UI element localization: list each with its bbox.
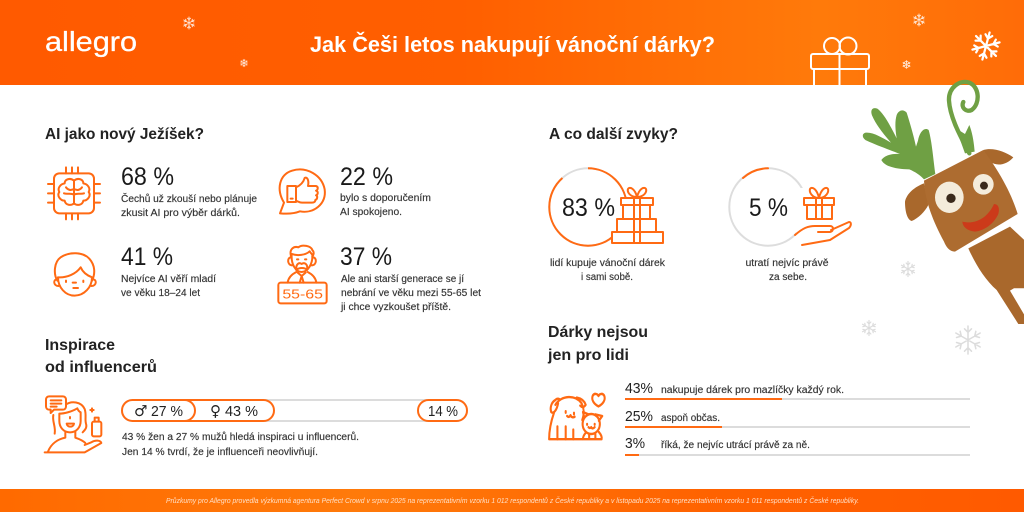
value: 83 % — [562, 194, 615, 222]
chart: 5 % ring — [729, 168, 854, 248]
caption: 83 %: lidí kupuje vánoční dárek — [550, 258, 666, 269]
chart: influencer pills — [122, 400, 467, 421]
heading: customs: A co další zvyky? — [549, 126, 678, 143]
pill: 14 %: 14 % — [428, 403, 458, 420]
pill: men 27 %: ♂ — [134, 402, 147, 420]
description: bylo s doporučením — [340, 193, 431, 204]
ears — [905, 149, 1013, 221]
pill: 14 % — [418, 400, 467, 421]
icon: header snowflakes — [184, 14, 1001, 68]
allegro logo: allegro — [45, 26, 137, 57]
left eye — [935, 182, 964, 213]
heading: AI: AI jako nový Ježíšek? — [45, 126, 204, 143]
stat: 68 % — [48, 163, 257, 219]
stat: 22 % — [280, 163, 431, 218]
description: Ale ani starší generace se jí — [341, 274, 464, 285]
footnote: Průzkumy pro Allegro provedla výzkumná agentura Perfect Crowd v srpnu 2025 na reprezentativním vzorku 1 012 respondentů z České republiky a v listopadu 2025 na reprezentativním vzorku 1 011 respondentů z České republiky. — [166, 496, 859, 505]
right eye — [973, 174, 994, 195]
icon: young face — [54, 253, 96, 296]
icon: older man with age tag: 55-65 — [282, 286, 323, 301]
icon: older man with age tag — [278, 246, 327, 303]
value: 68 % — [121, 163, 174, 191]
icon: header gift — [811, 38, 869, 85]
ring track — [549, 168, 627, 246]
value: 37 % — [340, 243, 392, 271]
bar: 43 % — [625, 380, 970, 400]
pill: men 27 % — [122, 400, 195, 421]
description: Čechů už zkouší nebo plánuje — [121, 192, 257, 205]
icon: influencer with product — [45, 396, 101, 452]
ring track — [729, 168, 807, 246]
influencer description: 43 % žen a 27 % mužů hledá inspiraci u influencerů. — [122, 431, 359, 443]
bar: 3 %: 3% — [625, 435, 645, 452]
value: 5 % — [749, 194, 788, 222]
pill: women 43 %: ♀ — [210, 402, 221, 420]
icon: gift stack — [612, 188, 663, 243]
bar: 43 %: nakupuje dárek pro mazlíčky každý rok. — [661, 385, 844, 396]
icon: thumbs up bubble — [280, 169, 325, 214]
heading: influencers: Inspirace — [45, 337, 115, 354]
illustration: reindeer — [863, 82, 1024, 324]
bar: 25 %: aspoň občas. — [661, 413, 720, 424]
pill: women 43 % — [150, 400, 274, 421]
description: Nejvíce AI věří mladí — [121, 274, 216, 285]
title: Jak Češi letos nakupují vánoční dárky? — [310, 32, 715, 57]
description: ji chce vyzkoušet příště. — [340, 302, 451, 313]
mouth — [962, 204, 999, 232]
track — [122, 400, 467, 421]
bar: 3 %: říká, že nejvíc utrácí právě za ně. — [661, 440, 810, 451]
ring value — [549, 168, 627, 246]
bar: 43 %: 43% — [625, 380, 653, 397]
bar: 25 % — [625, 408, 970, 428]
header band — [0, 0, 1024, 85]
pill: women 43 %: 43 % — [225, 403, 258, 420]
value: 41 % — [121, 243, 173, 271]
head — [924, 150, 1018, 252]
value: 22 % — [340, 163, 393, 191]
icon: dog and cat with heart — [549, 394, 605, 439]
right antler — [949, 82, 978, 153]
description: AI spokojeno. — [340, 207, 402, 218]
footer band — [0, 489, 1024, 512]
bar: 25 %: 25% — [625, 408, 653, 425]
description: nebrání ve věku mezi 55-65 let — [341, 288, 481, 299]
heading: influencers: od influencerů — [45, 359, 157, 376]
stat: 41 % — [54, 243, 216, 299]
heading: pets: Dárky nejsou — [548, 324, 648, 341]
left antler — [863, 108, 935, 179]
influencer description: Jen 14 % tvrdí, že je influenceři neovlivňují. — [122, 447, 318, 458]
caption: 83 %: i sami sobě. — [581, 272, 633, 283]
chart: 83 % ring — [549, 168, 663, 246]
pill: men 27 %: 27 % — [151, 403, 183, 420]
icon: gift on hand — [795, 188, 854, 248]
heading: pets: jen pro lidi — [547, 347, 629, 364]
bar: 3 % — [625, 435, 970, 456]
description: zkusit AI pro výběr dárků. — [121, 207, 240, 219]
ring value — [743, 168, 768, 178]
description: ve věku 18–24 let — [121, 288, 200, 299]
stat: 37 % — [278, 243, 481, 313]
caption: 5 %: za sebe. — [769, 272, 807, 283]
icon: light snowflakes on white — [862, 262, 980, 354]
body and leg — [968, 227, 1024, 324]
icon: brain chip — [48, 167, 100, 219]
caption: 5 %: utratí nejvíc právě — [746, 258, 829, 269]
